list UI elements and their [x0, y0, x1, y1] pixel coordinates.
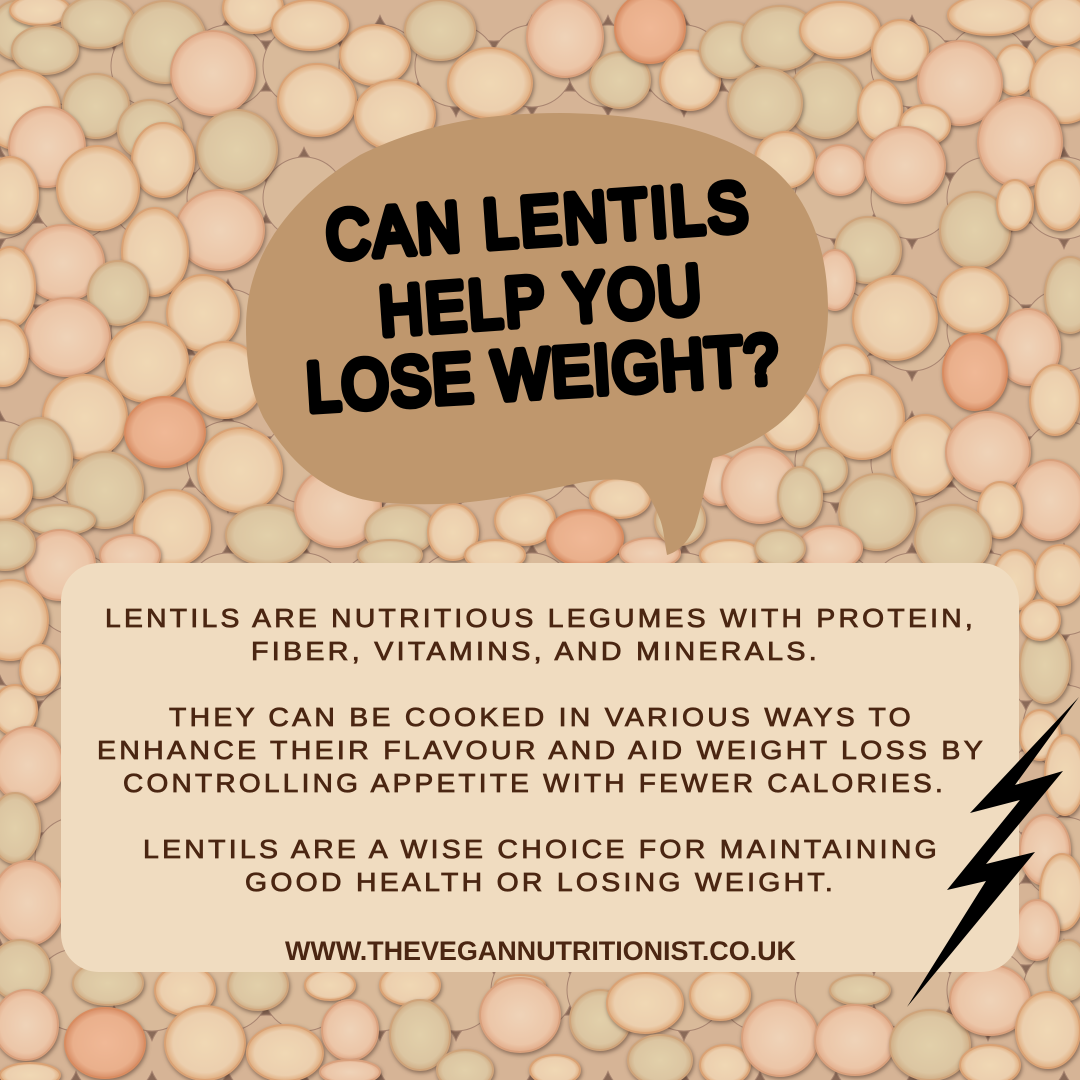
panel: summary [61, 563, 1019, 972]
paragraph: conclusion [143, 834, 940, 897]
icon: lightning bolt [907, 697, 1079, 1007]
paragraph: conclusion: GOOD HEALTH OR LOSING WEIGHT. [245, 867, 836, 897]
title: LOSE WEIGHT? [304, 321, 780, 426]
paragraph: what lentils are [105, 603, 976, 666]
title [304, 168, 780, 426]
website url: WWW.THEVEGANNUTRITIONIST.CO.UK [285, 936, 796, 966]
paragraph: cooking and weight loss [97, 702, 986, 798]
paragraph: what lentils are: LENTILS ARE NUTRITIOUS LEGUMES WITH PROTEIN, [105, 603, 976, 633]
paragraph: conclusion: LENTILS ARE A WISE CHOICE FOR MAINTAINING [143, 834, 940, 864]
title: HELP YOU [377, 251, 703, 350]
paragraph: cooking and weight loss: CONTROLLING APPETITE WITH FEWER CALORIES. [123, 768, 946, 798]
paragraph: cooking and weight loss: ENHANCE THEIR FLAVOUR AND AID WEIGHT LOSS BY [97, 735, 986, 765]
paragraph: what lentils are: FIBER, VITAMINS, AND MINERALS. [251, 636, 820, 666]
paragraph: cooking and weight loss: THEY CAN BE COOKED IN VARIOUS WAYS TO [169, 702, 914, 732]
speech bubble [246, 113, 828, 555]
title: CAN LENTILS [324, 168, 750, 274]
